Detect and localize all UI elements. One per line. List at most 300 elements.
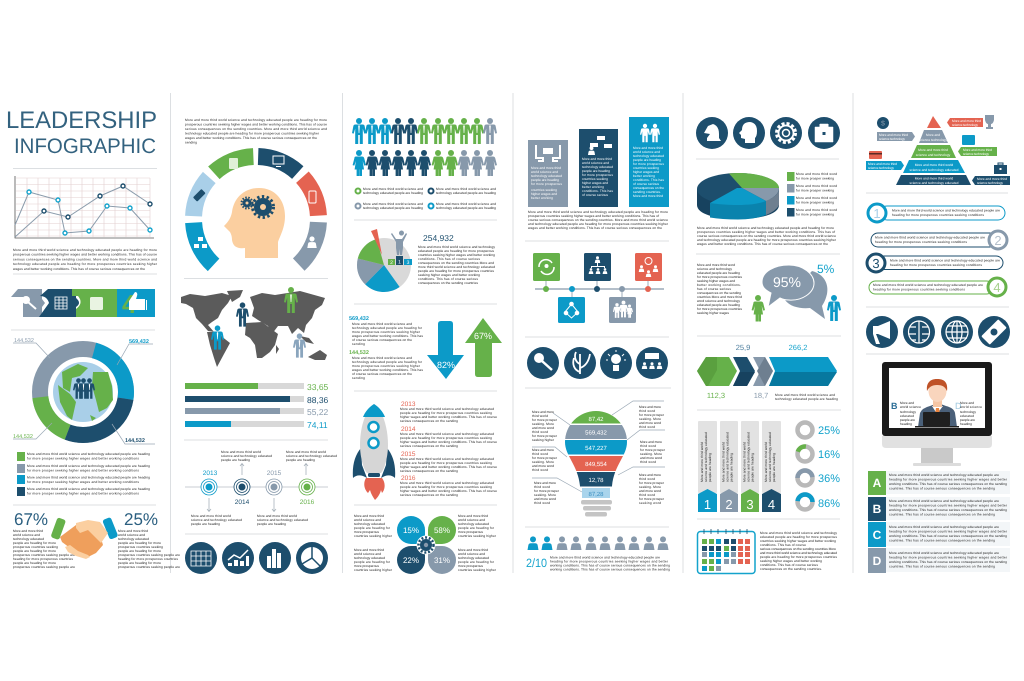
timeline 2013 to 2016: More and more third world bbox=[191, 514, 231, 518]
panel: three stepped boxes: More and more third bbox=[582, 157, 612, 161]
rocket bbox=[353, 404, 395, 500]
calendar paragraph: people are heading for more prosperous countries bbox=[760, 555, 837, 559]
timeline 2013 to 2016: people are heading bbox=[286, 458, 315, 462]
numbered pill rows: More and more third world science and technology educated people are bbox=[892, 208, 1000, 212]
bulb captions right: for more prosper bbox=[639, 413, 665, 417]
arrow stats text bbox=[349, 316, 423, 380]
computer monitor with presenter: More and bbox=[960, 401, 974, 405]
stat 254,932 text: 254,932 bbox=[423, 233, 454, 243]
pictogram legend: More and more third world science and bbox=[363, 202, 423, 206]
icon: two people shaking hands bbox=[640, 124, 660, 142]
pyramid diagram: science and technology educated bbox=[910, 168, 959, 172]
horizontal bar chart: 88,36 bbox=[307, 395, 329, 405]
label tab: gray: More and more third bbox=[879, 133, 908, 137]
timeline 2013 to 2016: 2014 bbox=[235, 499, 250, 506]
donut legend: for more prosper seeking higher wages and better working conditions bbox=[27, 480, 139, 484]
table row B bbox=[868, 497, 1010, 521]
chart paragraph: technology educated people are heading for more prosperous countries seeking higher bbox=[13, 262, 158, 266]
stat 254,932 text: consequences on the sending countries bbox=[418, 281, 478, 285]
bulb captions right: third word bbox=[639, 409, 655, 413]
percent donuts: 25% bbox=[818, 425, 840, 437]
numbered pill rows: 1 bbox=[873, 206, 881, 221]
panel: three stepped boxes: technology educated bbox=[531, 174, 562, 178]
column 4 paragraph: prosperous countries seeking higher wages and better working conditions. This has of bbox=[528, 214, 659, 218]
pyramid diagram: science technology bbox=[919, 138, 947, 142]
petal captions: technology educated bbox=[354, 556, 385, 560]
speech text block: for more prosperous countries bbox=[697, 307, 742, 311]
numbered bookmarks: 1 bbox=[704, 497, 711, 512]
icon: gear bbox=[416, 536, 436, 554]
stat 25 percent with text: More and more third bbox=[118, 529, 148, 533]
timeline 2013 to 2016: More and more third world bbox=[221, 450, 261, 454]
donut legend: for more prosper seeking higher wages and better working conditions bbox=[27, 492, 139, 496]
stat 67 percent with text bbox=[13, 510, 75, 569]
arrow stats text: sending bbox=[352, 342, 365, 346]
timeline 2013 to 2016: science and technology educated bbox=[221, 454, 272, 458]
timeline 2013 to 2016: people are heading bbox=[191, 522, 220, 526]
panel: three stepped boxes: More and more third bbox=[531, 166, 561, 170]
calendar paragraph: seeking higher wages and better working bbox=[760, 559, 822, 563]
computer monitor with presenter: B bbox=[891, 401, 898, 411]
column 4 paragraph: wages and better working conditions. This has of course serious consequences on the bbox=[528, 226, 662, 230]
bulb captions right: More and more bbox=[639, 473, 661, 477]
pictogram legend bbox=[356, 187, 496, 210]
rocket timeline text: 2016 bbox=[401, 475, 416, 482]
stat 25 percent with text: prosperous countries seeking bbox=[118, 545, 163, 549]
pie chart with podium bbox=[357, 229, 412, 292]
icon: calendar bbox=[55, 297, 67, 309]
bulb captions right: seeking. More bbox=[640, 452, 662, 456]
speech text block: science and technology bbox=[697, 267, 732, 271]
table row D: D bbox=[873, 554, 882, 568]
petal captions: technology educated bbox=[458, 522, 489, 526]
numbered pill rows: More and more third world science and technology educated people are bbox=[890, 258, 1000, 262]
stat 67 percent with text: More and more third bbox=[13, 529, 43, 533]
petal captions: world science and bbox=[458, 518, 485, 522]
petal captions: world science and bbox=[354, 518, 381, 522]
table row D: countries. This has of course serious consequences on the sending bbox=[889, 564, 995, 568]
table row A: heading for more prosperous countries seeking higher wages and better bbox=[889, 478, 1008, 482]
computer monitor with presenter: world science bbox=[960, 405, 982, 409]
bulb captions right: and more word bbox=[640, 456, 662, 460]
table row C: C bbox=[873, 528, 882, 542]
timeline 2013 to 2016: science and technology educated bbox=[286, 454, 337, 458]
label tab: green: More and more third bbox=[963, 148, 992, 152]
stat 67 percent with text: 67% bbox=[14, 510, 48, 529]
speech text block: better working conditions. bbox=[697, 283, 741, 287]
icon: refresh person bbox=[539, 260, 554, 274]
petal captions: More and more third bbox=[354, 514, 384, 518]
four petal percent chart: 58% bbox=[434, 526, 450, 535]
stat 254,932 text: people are heading for more prosperous countries bbox=[418, 269, 494, 273]
icon: clipboard bbox=[229, 158, 238, 169]
panel: three stepped boxes: countries seeking bbox=[582, 177, 608, 181]
numbered bookmarks: science and technology educated bbox=[768, 432, 772, 482]
stat 2/10 text: working conditions. This has of course serious consequences on the sending bbox=[550, 564, 670, 568]
table row B: More and more third world science and technology educated people are bbox=[889, 499, 999, 503]
numbered bookmarks: More and more third world bbox=[700, 442, 704, 482]
table row A: working conditions. This has of course serious consequences on the sending bbox=[889, 482, 1007, 486]
label tab: blue: science technology bbox=[868, 166, 894, 170]
speech text block: consequences on the sending bbox=[697, 291, 741, 295]
icon: dark person bbox=[236, 302, 249, 327]
stat 254,932 text bbox=[418, 233, 495, 285]
label tab: gray: science technology bbox=[879, 137, 905, 141]
bulb captions left: seeking higher bbox=[532, 438, 555, 442]
light bulb stacked chart: 849,554 bbox=[585, 461, 608, 468]
percent donuts bbox=[798, 422, 840, 510]
icon: network square bbox=[90, 297, 103, 310]
petal captions: more prosperous bbox=[354, 564, 379, 568]
computer monitor with presenter: heading bbox=[900, 422, 912, 426]
label tab: red: science technology bbox=[952, 123, 978, 127]
computer monitor with presenter: heading bbox=[960, 422, 972, 426]
arrow stats text: wages and better working conditions. This has bbox=[352, 334, 423, 338]
hexagon arrow sequence: 266,2 bbox=[789, 343, 807, 352]
column 2 intro paragraph: prosperous countries seeking higher wages and better working conditions. This has of course bbox=[185, 122, 327, 126]
panel: three stepped boxes: world science and bbox=[582, 161, 609, 165]
numbered bookmarks: people are heading bbox=[730, 453, 734, 482]
speech bubbles with people bbox=[752, 262, 841, 322]
numbered bookmarks bbox=[698, 421, 781, 512]
donut chart with globe bbox=[13, 338, 155, 444]
3D pie legend: More and more third word bbox=[796, 172, 837, 176]
stat 67 percent with text: heading for more prosperous countries bbox=[13, 557, 73, 561]
bulb captions left: third world bbox=[532, 414, 548, 418]
column 4 paragraph: and technology educated people are heading for more prosperous countries seeking higher bbox=[528, 222, 669, 226]
down arrow 82 percent: 82% bbox=[437, 360, 455, 370]
column 4 paragraph: More and more third world science and technology educated people are heading for more bbox=[528, 210, 668, 214]
3D pie legend: More and more third word bbox=[796, 208, 837, 212]
computer monitor with presenter: D bbox=[955, 401, 962, 411]
stat 67 percent with text: people are heading for more bbox=[13, 541, 56, 545]
rocket timeline text: 2015 bbox=[401, 451, 416, 458]
stat 254,932 text: conditions. This has of course serious bbox=[418, 257, 480, 261]
stat 67 percent with text: technology educated bbox=[13, 537, 44, 541]
bulb captions left: and more word bbox=[534, 497, 556, 501]
stat 25 percent with text: people are heading for more bbox=[118, 561, 161, 565]
label tab: dark bbox=[972, 176, 1010, 185]
hexagon arrow sequence: More and more third world science and bbox=[775, 393, 835, 397]
bulb captions right: seeking. More bbox=[639, 485, 661, 489]
panel: three stepped boxes: better working bbox=[633, 174, 655, 178]
rocket timeline text: higher wages and better working conditions. This has of course bbox=[400, 440, 497, 444]
table row A: countries. This has of course serious consequences on the sending bbox=[889, 486, 995, 490]
bulb captions left: More and more bbox=[532, 410, 554, 414]
percent donuts: 36% bbox=[818, 473, 840, 485]
percent donuts: 16% bbox=[818, 449, 840, 461]
computer monitor with presenter: people are bbox=[900, 418, 915, 422]
bulb captions right: third word bbox=[640, 460, 656, 464]
speech text block: for more prosperous countries bbox=[697, 275, 742, 279]
arrow stats text: technology educated people are heading for bbox=[352, 360, 423, 364]
donut legend: More and more third world science and technology educated people are heading bbox=[27, 464, 150, 468]
column 2 intro paragraph bbox=[185, 118, 327, 144]
pictogram legend: More and more third world science and bbox=[363, 187, 423, 191]
panel: three stepped boxes: technology educated bbox=[633, 154, 664, 158]
icon: gray person bbox=[293, 333, 306, 358]
bulb captions right: third word bbox=[639, 477, 655, 481]
petal captions: technology educated bbox=[354, 522, 385, 526]
rocket timeline text: people are heading for more prosperous countries seeking bbox=[400, 485, 492, 489]
icon: wallet bbox=[962, 135, 975, 145]
stat 2/10 text: working conditions. This has of course serious consequences on the sending bbox=[550, 568, 670, 572]
3D pie paragraph: wages and better working conditions. This has of course serious consequences on the bbox=[697, 242, 828, 246]
timeline 2013 to 2016: More and more third world bbox=[257, 514, 297, 518]
3D pie legend bbox=[787, 172, 837, 216]
numbered bookmarks: people are heading bbox=[708, 453, 712, 482]
bulb captions right: third word bbox=[640, 444, 656, 448]
petal captions: more prosperous bbox=[458, 564, 483, 568]
numbered pill rows: 4 bbox=[993, 280, 1001, 295]
label tab: green: science technology bbox=[963, 152, 989, 156]
title: LEADERSHIP bbox=[6, 107, 157, 134]
computer monitor with presenter: educated bbox=[960, 414, 974, 418]
four petal percent chart: 22% bbox=[403, 556, 419, 565]
table row C: heading for more prosperous countries seeking higher wages and better bbox=[889, 530, 1008, 534]
petal captions: more prosperous bbox=[458, 530, 483, 534]
3D pie legend: for more prosper seeking bbox=[796, 176, 834, 180]
numbered bookmarks: 3 bbox=[746, 497, 754, 512]
icon row: megaphone brain globe money bbox=[866, 316, 1010, 348]
timeline 2013 to 2016 bbox=[185, 450, 337, 526]
stat 254,932 text: countries seeking higher wages and better working bbox=[418, 253, 495, 257]
puzzle number strip: 4 bbox=[122, 289, 137, 319]
numbered pill rows: heading for more prosperous countries seeking conditions bbox=[873, 288, 965, 292]
stat 25 percent with text: heading for more prosperous countries bbox=[118, 557, 178, 561]
petal captions: countries seeking higher bbox=[458, 534, 497, 538]
bulb captions right: and more word bbox=[639, 421, 661, 425]
3D pie legend: for more prosper seeking bbox=[796, 188, 834, 192]
table row D bbox=[868, 548, 1010, 573]
stat 67 percent with text: people are heading for more bbox=[13, 549, 56, 553]
panel: three stepped boxes: consequences on the bbox=[633, 186, 664, 190]
stat 254,932 text: consequences on the sending countries More and bbox=[418, 261, 494, 265]
calendar paragraph: countries seeking higher wages and better working bbox=[760, 539, 836, 543]
speech text block: educated people are heading bbox=[697, 271, 740, 275]
computer monitor with presenter: world science bbox=[900, 405, 921, 409]
table row A: A bbox=[873, 476, 882, 490]
donut legend: More and more third world science and technology educated people are heading bbox=[27, 452, 150, 456]
timeline 2013 to 2016: science and technology educated bbox=[191, 518, 242, 522]
calendar paragraph: conditions. This has of course bbox=[760, 543, 806, 547]
numbered pill rows: 2 bbox=[994, 233, 1002, 248]
bulb captions right: seeking. More bbox=[639, 417, 661, 421]
four petal percent chart: 15% bbox=[403, 526, 419, 535]
panel: three stepped boxes: technology educated bbox=[582, 165, 613, 169]
speech text block: has of course serious bbox=[697, 287, 731, 291]
numbered bookmarks: science and technology educated bbox=[746, 432, 750, 482]
timeline 2013 to 2016: people are heading bbox=[257, 522, 286, 526]
up arrow 67 percent bbox=[465, 318, 502, 377]
numbered pill rows: heading for more prosperous countries seeking conditions bbox=[892, 213, 984, 217]
column 2 intro paragraph: More and more third world science and technology educated people are heading for more bbox=[185, 118, 327, 122]
numbered bookmarks: More and more third world bbox=[722, 442, 726, 482]
column 2 intro paragraph: serious consequences on the sending countries. More and more third world science and bbox=[185, 127, 327, 131]
calendar paragraph: and more third world science and technology educated bbox=[760, 551, 837, 555]
rocket timeline text: More and more third world science and technology educated bbox=[400, 432, 494, 436]
rocket timeline text: More and more third world science and technology educated bbox=[400, 481, 494, 485]
title: INFOGRAPHIC bbox=[14, 135, 156, 158]
bulb captions left: third word bbox=[534, 501, 550, 505]
panel: three stepped boxes: higher wages and bbox=[531, 192, 557, 196]
petal captions: world science and bbox=[354, 552, 381, 556]
stat 2/10 text: More and more third world science and technology educated people are bbox=[550, 556, 660, 560]
bulb captions left: third word bbox=[532, 430, 548, 434]
speech text block: seeking higher wages and bbox=[697, 279, 735, 283]
calendar paragraph: serious consequences on the sending countries More bbox=[760, 547, 836, 551]
pie chart with podium: 1 bbox=[398, 260, 401, 266]
icon: network triangle bbox=[564, 302, 579, 318]
petal captions: countries seeking higher bbox=[354, 534, 393, 538]
pie chart with podium: 2 bbox=[390, 260, 393, 266]
icon row: microphone plant bulb audience bbox=[527, 347, 668, 379]
arrow stats text: wages and better working conditions. This has bbox=[352, 368, 423, 372]
bulb captions left: third word bbox=[532, 468, 548, 472]
speech bubbles with people: 5% bbox=[817, 262, 835, 276]
timeline 2013 to 2016: More and more third world bbox=[286, 450, 326, 454]
rocket timeline text: serious consequences on the sending bbox=[400, 419, 458, 423]
arrow stats text: of course serious consequences on the bbox=[352, 338, 412, 342]
petal captions: people are heading for bbox=[458, 526, 495, 530]
horizontal bar chart: 55,22 bbox=[307, 407, 329, 417]
pyramid diagram: More and more third world bbox=[915, 163, 953, 167]
head and gears ring diagram bbox=[193, 156, 318, 282]
panel: three stepped boxes: world science and bbox=[633, 150, 660, 154]
petal captions: more prosperous bbox=[354, 530, 379, 534]
computer monitor with presenter: educated bbox=[900, 414, 914, 418]
bulb captions left: for more prosper bbox=[534, 489, 560, 493]
numbered bookmarks: science and technology educated bbox=[726, 432, 730, 482]
donut legend: for more prosper seeking higher wages and better working conditions bbox=[27, 468, 139, 472]
icon: trophy bbox=[985, 115, 994, 129]
3D pie legend: for more prosper seeking bbox=[796, 200, 834, 204]
bulb captions right: for more prosper bbox=[639, 481, 665, 485]
3D pie paragraph: and technology educated people are heading for more prosperous countries seeking higher bbox=[697, 238, 837, 242]
icon: org chart bbox=[194, 237, 207, 248]
bulb captions left: More and more bbox=[534, 481, 556, 485]
panel: three stepped boxes: countries seeking bbox=[633, 166, 659, 170]
table row D: working conditions. This has of course serious consequences on the sending bbox=[889, 560, 1007, 564]
panel: three stepped boxes: better working bbox=[582, 185, 604, 189]
light bulb stacked chart: 87,28 bbox=[588, 491, 604, 498]
petal captions: More and more third bbox=[458, 514, 488, 518]
column divider lines bbox=[170, 93, 853, 573]
numbered pill rows: More and more third world science and technology educated people are bbox=[873, 283, 983, 287]
icon: hierarchy bbox=[589, 256, 607, 274]
icon: dollar coin: $ bbox=[881, 120, 885, 128]
bulb captions right bbox=[639, 405, 666, 505]
stat 2/10 text bbox=[526, 556, 670, 572]
stat 254,932 text: conditions. This has of course serious bbox=[418, 277, 478, 281]
stat 25 percent with text: world science and bbox=[118, 533, 145, 537]
chart paragraph: prosperous countries seeking higher wages and better working conditions. This has of course bbox=[13, 253, 157, 257]
table row B: B bbox=[873, 502, 882, 516]
rocket timeline text: people are heading for more prosperous countries seeking bbox=[400, 461, 492, 465]
icon: family bbox=[613, 301, 633, 318]
chart paragraph: serious consequences on the sending countries. More and more third world science and bbox=[13, 257, 157, 261]
pyramid diagram: More and more third world bbox=[915, 176, 953, 180]
stat 25 percent with text bbox=[118, 510, 180, 569]
panel: three stepped boxes: for more prosperous bbox=[531, 182, 562, 186]
chart paragraph: wages and better working conditions. This has of course serious consequences on the bbox=[13, 267, 145, 271]
column 4 paragraph: course serious consequences on the sending countries. More and more third world science bbox=[528, 218, 668, 222]
stat 254,932 text: More and more third world science and technology bbox=[418, 245, 495, 249]
bulb captions left: More and more bbox=[532, 448, 554, 452]
hexagon arrow sequence bbox=[697, 343, 838, 401]
timeline 2013 to 2016: 2013 bbox=[203, 470, 218, 477]
numbered pill rows: heading for more prosperous countries seeking conditions bbox=[875, 240, 967, 244]
arrow stats text: More and more third world science and bbox=[352, 356, 412, 360]
stat 254,932 text: educated people are heading for more prosperous bbox=[418, 249, 494, 253]
bulb captions left: seeking. More bbox=[532, 460, 554, 464]
hexagon arrow sequence: technology educated people are heading bbox=[775, 397, 838, 401]
arrow stats text: 569,432 bbox=[349, 316, 369, 322]
speech bubbles with people: 95% bbox=[773, 274, 801, 290]
donut chart with globe: 569,432 bbox=[129, 339, 149, 345]
rocket timeline text bbox=[400, 401, 497, 497]
table row D: heading for more prosperous countries seeking higher wages and better bbox=[889, 556, 1008, 560]
computer monitor with presenter: people are bbox=[960, 418, 975, 422]
numbered pill rows bbox=[867, 204, 1007, 296]
stat 67 percent with text: people are heading for more bbox=[13, 561, 56, 565]
table row C bbox=[868, 522, 1010, 547]
3D pie paragraph bbox=[697, 226, 837, 246]
label tab: green bbox=[958, 147, 997, 156]
table row C: More and more third world science and technology educated people are bbox=[889, 525, 999, 529]
rocket timeline text: serious consequences on the sending bbox=[400, 469, 458, 473]
bulb captions right: for more prosper bbox=[640, 448, 666, 452]
speech text block: word science and technology bbox=[697, 299, 740, 303]
pictogram 2 of 10 busts bbox=[528, 536, 668, 550]
icon: team target bbox=[639, 258, 658, 277]
numbered bookmarks: people are heading bbox=[750, 453, 754, 482]
pyramid diagram: science and technology educated bbox=[910, 181, 959, 185]
table row C: countries. This has of course serious consequences on the sending bbox=[889, 538, 995, 542]
3D pie legend: More and more third word bbox=[796, 184, 837, 188]
chart paragraph bbox=[13, 248, 158, 271]
panel: three stepped boxes: More and more third bbox=[633, 194, 663, 198]
computer monitor with presenter bbox=[882, 362, 992, 466]
panel: three stepped boxes: of course serious bbox=[633, 182, 659, 186]
light bulb stacked chart: 547,227 bbox=[585, 445, 608, 452]
icon: green person bbox=[284, 287, 298, 313]
donut chart with globe: 144,532 bbox=[14, 338, 34, 344]
rocket timeline text: higher wages and better working conditions. This has of course bbox=[400, 489, 497, 493]
line chart bbox=[15, 176, 154, 238]
light bulb stacked chart: 12,78 bbox=[588, 477, 604, 484]
numbered bookmarks: science and technology educated bbox=[704, 432, 708, 482]
numbered bookmarks: More and more third world bbox=[764, 442, 768, 482]
arrow stats text: of course serious consequences on the bbox=[352, 372, 412, 376]
down arrow 82 percent bbox=[427, 321, 464, 379]
donut chart with globe: 144,532 bbox=[125, 438, 145, 444]
donut legend: for more prosper seeking higher wages and better working conditions bbox=[27, 456, 139, 460]
numbered pill rows: heading for more prosperous countries seeking conditions bbox=[890, 263, 982, 267]
stat 67 percent with text: world science and bbox=[13, 533, 40, 537]
label tab: blue: More and more third bbox=[868, 162, 897, 166]
pyramid diagram: More and bbox=[926, 133, 940, 137]
stat 67 percent with text: prosperous countries seeking people are bbox=[13, 565, 75, 569]
bulb captions right: More and more bbox=[640, 440, 662, 444]
column 2 intro paragraph: sending bbox=[185, 140, 197, 144]
bulb captions right: seeking word bbox=[639, 501, 661, 505]
numbered bookmarks: 4 bbox=[768, 497, 775, 512]
hexagon arrow sequence: 112,3 bbox=[707, 391, 725, 400]
numbered pill rows: 3 bbox=[872, 256, 880, 271]
puzzle number strip bbox=[11, 289, 155, 319]
rocket timeline text: higher wages and better working conditions. This has of course bbox=[400, 415, 497, 419]
